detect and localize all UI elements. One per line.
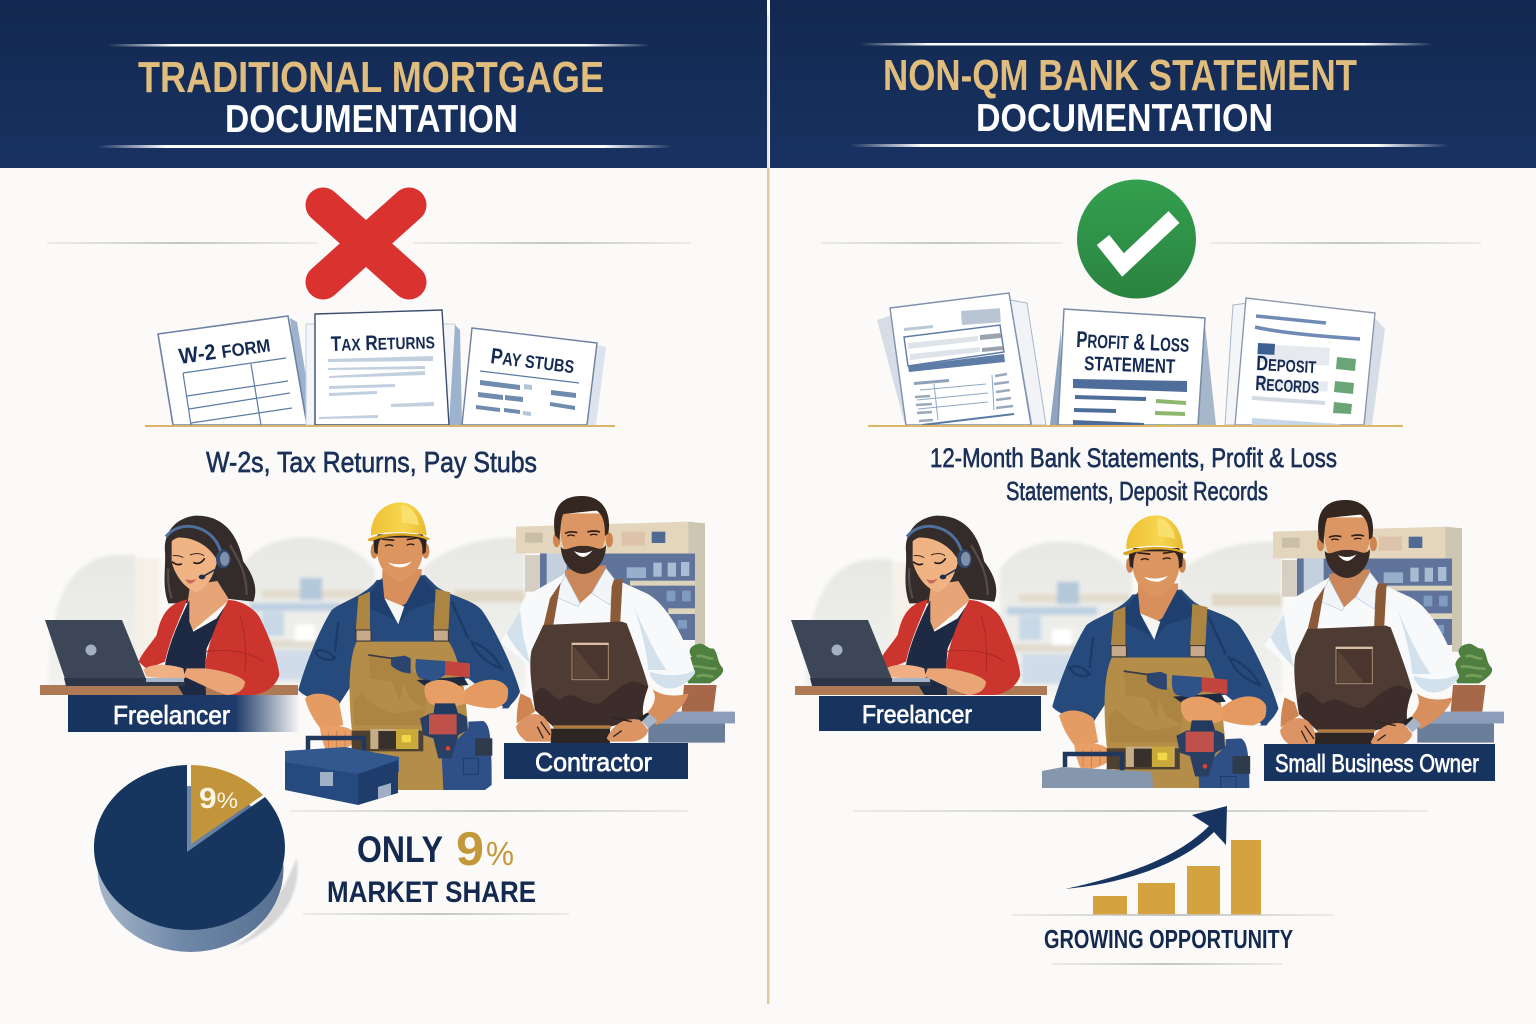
callout: only 9% market share: MARKET SHARE <box>327 876 536 909</box>
panel: traditional mortgage header: DOCUMENTATION <box>225 98 518 141</box>
document: tax returns <box>306 310 462 425</box>
background scene: left <box>48 537 525 690</box>
panel: non-qm header <box>770 0 1536 168</box>
documents: W-2, tax returns, pay stubs <box>145 310 615 427</box>
person: freelancer right <box>880 516 1020 695</box>
document: W-2 form: W-2 FORM <box>177 331 272 369</box>
plant and counter: right <box>1417 644 1504 743</box>
label: contractor: Contractor <box>535 747 652 777</box>
label: contractor <box>504 743 688 779</box>
document: deposit records <box>1225 298 1385 426</box>
document: deposit records: DEPOSIT <box>1256 352 1317 378</box>
shelf: left <box>516 522 705 647</box>
heading: growing opportunity: GROWING OPPORTUNITY <box>1044 924 1293 954</box>
person: freelancer left <box>139 516 279 695</box>
label: small business owner <box>1264 744 1495 781</box>
person: shop owner right <box>1264 500 1459 747</box>
document: profit and loss: STATEMENT <box>1084 353 1176 378</box>
label: freelancer left: Freelancer <box>113 700 230 730</box>
person: contractor left <box>298 502 520 790</box>
arrow: growth <box>1065 806 1227 889</box>
callout: only 9% market share: 9 <box>456 822 484 875</box>
document: profit and loss <box>1050 309 1216 426</box>
panel: non-qm header: DOCUMENTATION <box>976 97 1273 140</box>
document: pay stubs <box>462 328 606 425</box>
icon: toolbox left <box>285 738 399 805</box>
documents: bank statements, profit and loss, deposit records <box>868 293 1403 427</box>
document: tax returns: TAX RETURNS <box>331 330 435 356</box>
shelf: right <box>1273 527 1462 652</box>
pie chart: 9 percent market share <box>94 765 298 952</box>
caption: non-qm documents: Statements, Deposit Records <box>1006 476 1268 506</box>
icon: toolbox right <box>1042 754 1153 788</box>
bar chart: growing opportunity <box>853 806 1428 965</box>
pie label: 9% <box>199 783 238 815</box>
caption: non-qm documents: 12-Month Bank Statements, Profit & Loss <box>930 443 1337 473</box>
label: freelancer left <box>68 695 300 732</box>
background scene: right <box>805 541 1282 694</box>
heading: traditional mortgage: TRADITIONAL MORTGAGE <box>138 53 604 102</box>
center divider <box>767 15 770 1004</box>
callout: only 9% market share: ONLY <box>357 829 443 870</box>
caption: traditional documents: W-2s, Tax Returns, Pay Stubs <box>206 447 537 479</box>
document: W-2 form <box>158 316 314 425</box>
label: freelancer right <box>819 696 1041 731</box>
label: small business owner: Small Business Owner <box>1275 750 1479 778</box>
laptop: left <box>45 620 185 686</box>
document: bank statement <box>877 293 1046 425</box>
callout: only 9% market share: % <box>486 835 514 872</box>
icon: green check <box>821 180 1481 298</box>
document: profit and loss: PROFIT & LOSS <box>1076 326 1190 357</box>
callout: only 9% market share <box>290 810 688 915</box>
plant and counter: left <box>648 644 735 743</box>
document: pay stubs: PAY STUBS <box>489 343 576 378</box>
label: freelancer right: Freelancer <box>862 701 972 729</box>
document: deposit records: RECORDS <box>1255 372 1320 398</box>
panel: traditional mortgage header <box>0 0 767 168</box>
icon: red X <box>47 205 691 282</box>
desk: right <box>795 686 1047 695</box>
person: shop owner left <box>500 496 695 743</box>
laptop: right <box>791 620 931 686</box>
person: contractor right <box>1052 515 1278 809</box>
heading: non-qm bank statement: NON-QM BANK STATEMENT <box>883 51 1357 100</box>
caption: non-qm documents <box>930 443 1337 506</box>
desk: left <box>40 685 298 695</box>
